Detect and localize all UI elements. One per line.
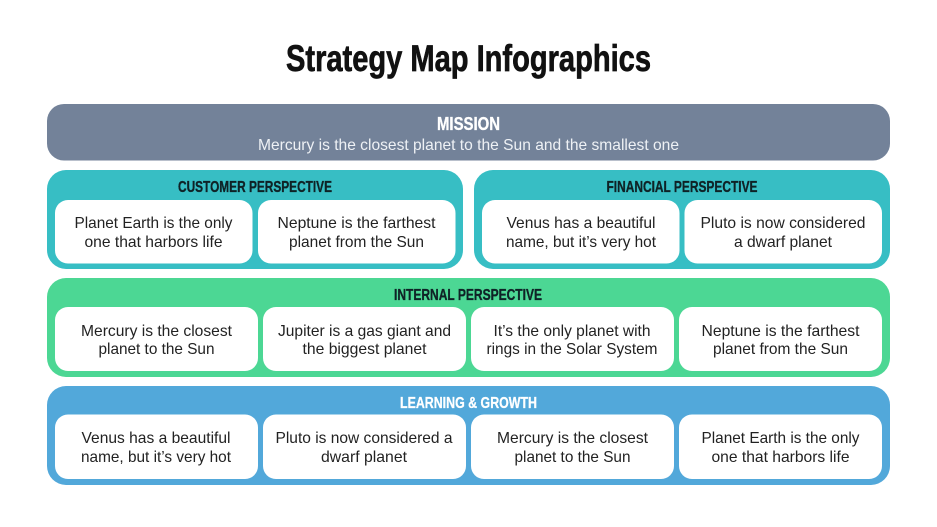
- internal heading: INTERNAL PERSPECTIVE: [394, 287, 542, 304]
- card: venus: Venus has a beautiful: [82, 430, 230, 447]
- card: neptune: planet from the Sun: [289, 234, 424, 251]
- title: Strategy Map Infographics: [286, 38, 651, 79]
- card: mercury: planet to the Sun: [514, 449, 630, 466]
- panel: internal perspective: [47, 278, 890, 377]
- card: saturn: It’s the only planet with: [494, 323, 650, 340]
- card: mercury: planet to the Sun: [98, 341, 214, 358]
- card: pluto: Pluto is now considered: [700, 215, 866, 232]
- card: neptune: planet from the Sun: [713, 341, 848, 358]
- card: mercury: [55, 307, 258, 371]
- card: pluto: Pluto is now considered a: [276, 430, 453, 447]
- card: planet earth: [55, 200, 252, 264]
- card: pluto: [684, 200, 882, 264]
- card: pluto: dwarf planet: [321, 449, 408, 466]
- panel: financial perspective: [474, 170, 890, 269]
- card: mercury: Mercury is the closest: [497, 430, 649, 447]
- card: venus: [482, 200, 680, 264]
- panel: learning and growth: [47, 386, 890, 485]
- card: neptune: Neptune is the farthest: [278, 215, 436, 232]
- card: neptune: Neptune is the farthest: [702, 323, 860, 340]
- card: planet earth: one that harbors life: [84, 234, 223, 251]
- card: jupiter: the biggest planet: [302, 341, 427, 358]
- card: planet earth: one that harbors life: [712, 449, 850, 466]
- panel: customer perspective: [47, 170, 463, 269]
- card: venus: name, but it’s very hot: [81, 449, 232, 466]
- card: neptune: [258, 200, 456, 264]
- card: mercury: Mercury is the closest: [81, 323, 233, 340]
- card: pluto: a dwarf planet: [734, 234, 833, 251]
- card: jupiter: [263, 307, 466, 371]
- financial heading: FINANCIAL PERSPECTIVE: [606, 179, 758, 196]
- panel: mission: [47, 104, 890, 160]
- card: saturn: rings in the Solar System: [486, 341, 658, 358]
- card: venus: [55, 414, 258, 479]
- card: venus: name, but it’s very hot: [506, 234, 657, 251]
- card: planet earth: Planet Earth is the only: [74, 215, 232, 232]
- card: saturn: [471, 307, 674, 371]
- card: pluto: [263, 414, 466, 479]
- mission heading: MISSION: [437, 114, 500, 134]
- card: mercury: [471, 414, 674, 479]
- customer heading: CUSTOMER PERSPECTIVE: [178, 179, 332, 196]
- card: venus: Venus has a beautiful: [506, 215, 656, 232]
- card: planet earth: Planet Earth is the only: [702, 430, 860, 447]
- card: neptune: [679, 307, 882, 371]
- card: jupiter: Jupiter is a gas giant and: [278, 323, 451, 340]
- mission text: Mercury is the closest planet to the Sun and the smallest one: [258, 137, 679, 154]
- card: planet earth: [679, 414, 882, 479]
- learning heading: LEARNING & GROWTH: [400, 395, 537, 412]
